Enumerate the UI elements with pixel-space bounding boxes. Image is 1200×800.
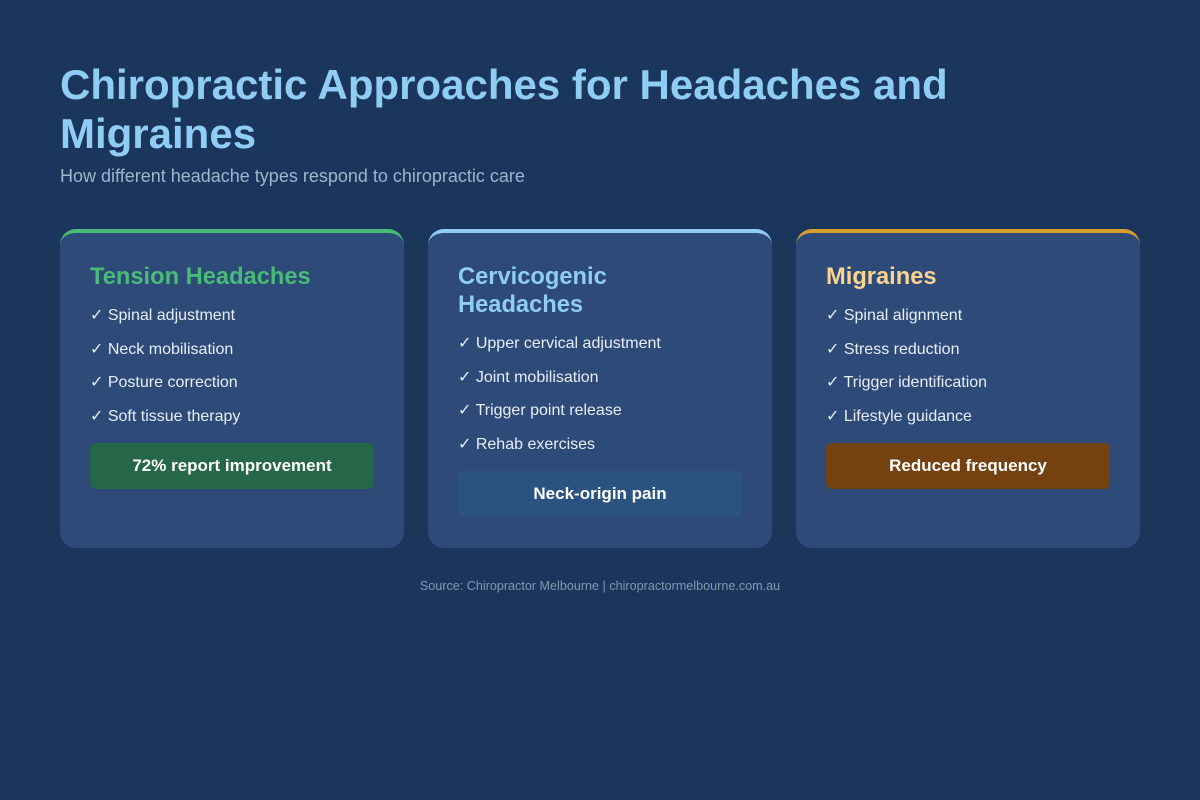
title: Chiropractic Approaches for Headaches and Migraines	[60, 61, 948, 157]
badge: neck-origin: Neck-origin pain	[533, 484, 667, 503]
badge: improvement	[90, 443, 374, 489]
panel: cervicogenic headaches	[428, 229, 772, 548]
badge: frequency	[826, 443, 1110, 489]
source footer: Source: Chiropractor Melbourne | chiropractormelbourne.com.au	[420, 579, 780, 593]
panel: tension headaches	[60, 229, 404, 548]
heading: cervicogenic: Cervicogenic	[458, 264, 607, 290]
subtitle: How different headache types respond to chiropractic care	[60, 166, 525, 186]
list: tension: ✓ Soft tissue therapy	[90, 408, 240, 425]
badge: improvement: 72% report improvement	[132, 456, 332, 475]
list: migraines: ✓ Lifestyle guidance	[826, 408, 972, 425]
list: tension: ✓ Spinal adjustment	[90, 307, 235, 324]
heading: tension: Tension Headaches	[90, 264, 311, 290]
panel: migraines	[796, 229, 1140, 548]
list: tension: ✓ Posture correction	[90, 374, 238, 391]
heading: migraines: Migraines	[826, 264, 937, 290]
list: tension: ✓ Neck mobilisation	[90, 341, 233, 358]
list: migraines: ✓ Trigger identification	[826, 374, 987, 391]
heading: cervicogenic	[458, 264, 607, 318]
list: cervicogenic: ✓ Rehab exercises	[458, 436, 595, 453]
list: cervicogenic: ✓ Upper cervical adjustment	[458, 335, 661, 352]
badge: frequency: Reduced frequency	[889, 456, 1047, 475]
list: migraines	[826, 307, 987, 425]
list: cervicogenic: ✓ Trigger point release	[458, 402, 622, 419]
list: tension	[90, 307, 240, 425]
list: cervicogenic	[458, 335, 661, 453]
list: migraines: ✓ Stress reduction	[826, 341, 959, 358]
badge: neck-origin	[458, 471, 742, 517]
list: cervicogenic: ✓ Joint mobilisation	[458, 369, 599, 386]
heading: cervicogenic: Headaches	[458, 292, 583, 318]
list: migraines: ✓ Spinal alignment	[826, 307, 962, 324]
